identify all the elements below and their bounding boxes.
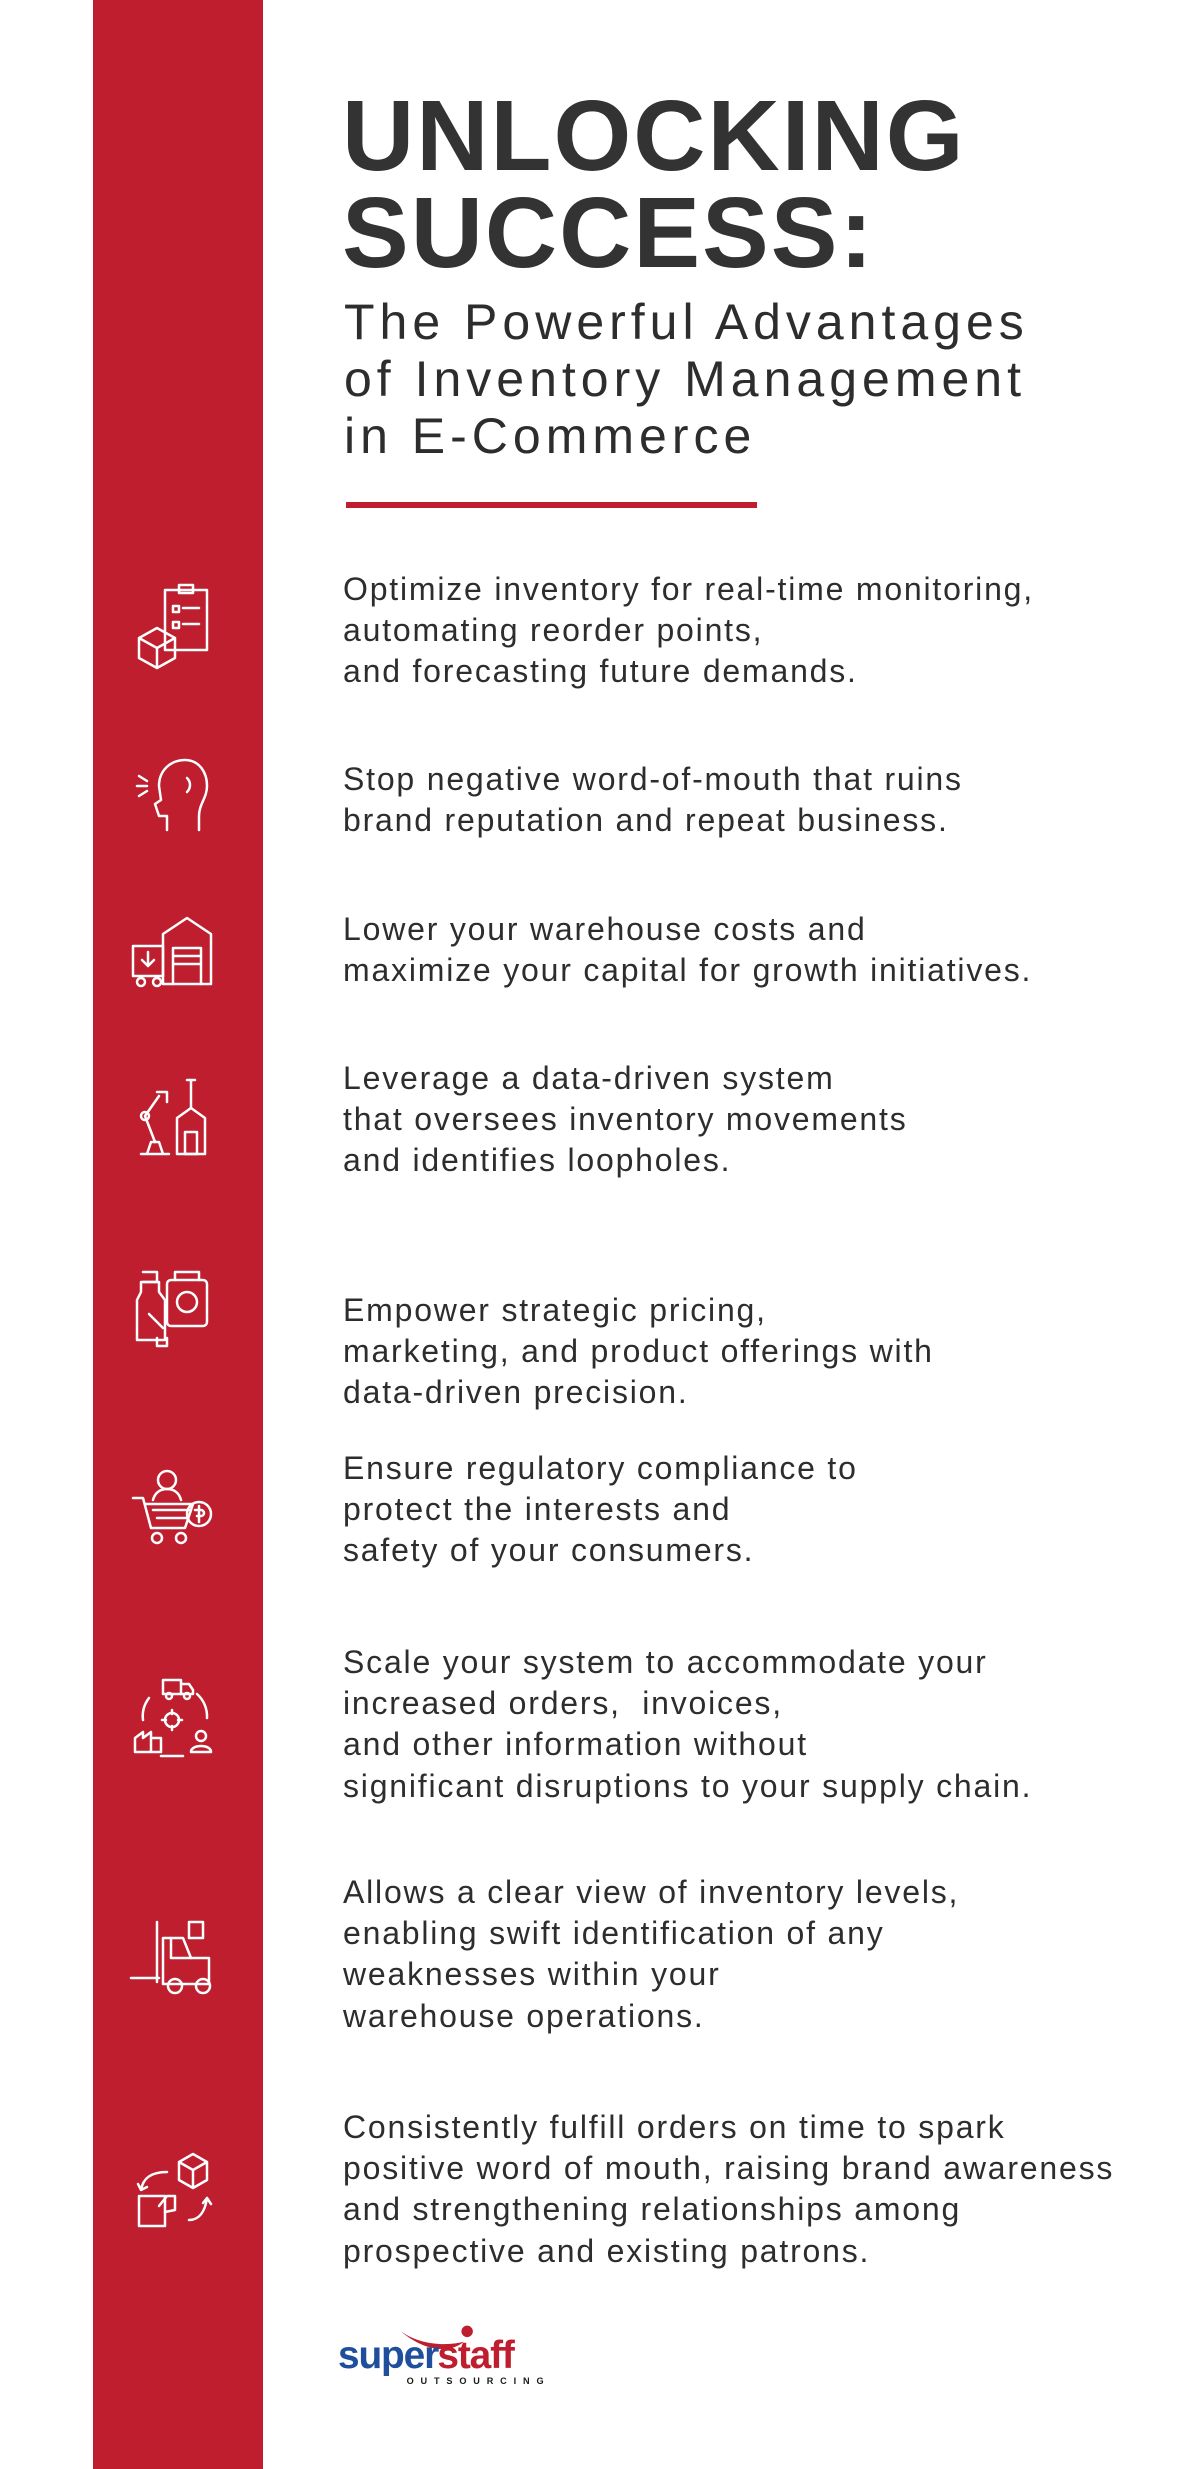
text: item 7: and other information without <box>343 1726 808 1762</box>
subtitle: The Powerful Advantages <box>344 294 1029 350</box>
logo: superstaff outsourcing: OUTSOURCING <box>407 2376 550 2386</box>
text: item 7: increased orders, invoices, <box>343 1685 783 1721</box>
text: item 4: and identifies loopholes. <box>343 1142 731 1178</box>
text: item 4: Leverage a data-driven system <box>343 1060 835 1096</box>
text: item 8: Allows a clear view of inventory levels, <box>343 1874 959 1910</box>
text: item 8: enabling swift identification of any <box>343 1915 885 1951</box>
logo: superstaff outsourcing <box>338 2326 550 2386</box>
text: item 5 <box>343 1292 934 1410</box>
text: item 9 <box>343 2109 1114 2269</box>
title: SUCCESS: <box>342 177 875 289</box>
text: item 2 <box>343 761 963 838</box>
icon: supply cycle <box>134 1678 212 1758</box>
text: item 8: weaknesses within your <box>343 1956 721 1992</box>
text: item 3: maximize your capital for growth initiatives. <box>343 952 1032 988</box>
text: item 2: Stop negative word-of-mouth that ruins <box>343 761 963 797</box>
icon: cart with coin <box>132 1470 212 1544</box>
text: item 2: brand reputation and repeat business. <box>343 802 949 838</box>
text: item 6: protect the interests and <box>343 1491 731 1527</box>
title <box>342 80 966 289</box>
text: item 1: Optimize inventory for real-time monitoring, <box>343 571 1034 607</box>
icon: robotic arm <box>140 1078 206 1156</box>
text: item 9: positive word of mouth, raising brand awareness <box>343 2150 1114 2186</box>
text: item 6 <box>343 1450 858 1568</box>
icon: products <box>136 1270 208 1348</box>
subtitle: in E-Commerce <box>344 408 756 464</box>
logo: superstaff outsourcing: super <box>338 2334 439 2377</box>
text: item 7: Scale your system to accommodate your <box>343 1644 988 1680</box>
text: item 6: Ensure regulatory compliance to <box>343 1450 858 1486</box>
text: item 5: Empower strategic pricing, <box>343 1292 767 1328</box>
text: item 3 <box>343 911 1032 988</box>
text: item 7 <box>343 1644 1032 1804</box>
text: item 1: and forecasting future demands. <box>343 653 858 689</box>
text: item 5: data-driven precision. <box>343 1374 689 1410</box>
text: item 4 <box>343 1060 908 1178</box>
subtitle <box>344 294 1029 464</box>
icon: warehouse <box>132 916 212 988</box>
text: item 8 <box>343 1874 959 2034</box>
subtitle: of Inventory Management <box>344 351 1026 407</box>
title: UNLOCKING <box>342 80 966 192</box>
text: item 1: automating reorder points, <box>343 612 763 648</box>
icon: clipboard and box <box>138 584 208 670</box>
text: item 4: that oversees inventory movements <box>343 1101 908 1137</box>
text: item 9: Consistently fulfill orders on time to spark <box>343 2109 1006 2145</box>
icon: hand-off box <box>136 2152 212 2228</box>
text: item 5: marketing, and product offerings with <box>343 1333 934 1369</box>
text: item 7: significant disruptions to your supply chain. <box>343 1768 1032 1804</box>
icon: forklift <box>130 1920 212 1994</box>
text: item 8: warehouse operations. <box>343 1998 705 2034</box>
icon: head speaking <box>136 758 208 832</box>
text: item 1 <box>343 571 1034 689</box>
text: item 9: prospective and existing patrons. <box>343 2233 870 2269</box>
text: item 6: safety of your consumers. <box>343 1532 754 1568</box>
logo: superstaff outsourcing: staff <box>437 2334 516 2377</box>
text: item 9: and strengthening relationships among <box>343 2191 961 2227</box>
text: item 3: Lower your warehouse costs and <box>343 911 867 947</box>
